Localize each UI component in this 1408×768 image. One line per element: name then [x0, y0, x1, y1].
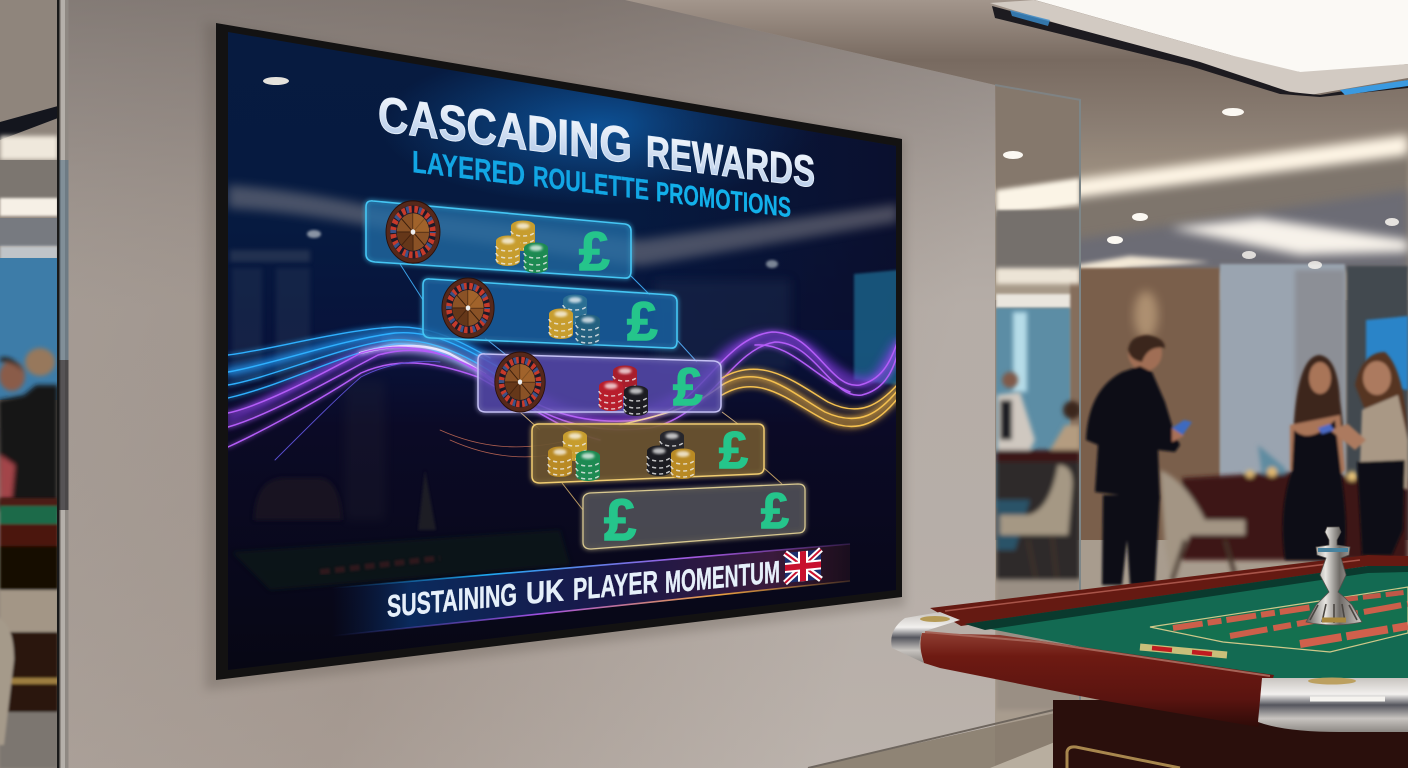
banner text — [387, 554, 780, 624]
chips — [549, 294, 600, 345]
blue glow behind title — [402, 72, 783, 198]
counter behind people — [1160, 445, 1408, 580]
reflected table — [0, 498, 58, 768]
cove light strip — [997, 135, 1408, 208]
left mirror reflection — [0, 0, 68, 768]
front rail — [920, 633, 1274, 727]
glass panel with reflection — [995, 80, 1081, 726]
green felt — [965, 566, 1408, 682]
subtitle: PROMOTIONS — [656, 176, 791, 223]
banner text: MOMENTUM — [665, 554, 780, 600]
chips left — [548, 430, 600, 481]
bottom banner — [332, 544, 850, 636]
title: REWARDS — [646, 127, 815, 197]
chips right — [647, 430, 695, 479]
roulette wheel — [386, 201, 440, 263]
pound icon right: £ — [761, 483, 789, 539]
chips — [496, 220, 548, 273]
TV screen display — [228, 30, 898, 670]
floor — [995, 540, 1408, 768]
flowing light waves — [228, 327, 898, 460]
tier 3 panel — [478, 352, 721, 417]
person: man in dark suit — [1086, 335, 1192, 585]
floor below wall — [808, 726, 995, 768]
betting layout — [1140, 587, 1408, 655]
pound icon: £ — [719, 422, 748, 480]
banner text: SUSTAINING — [387, 577, 517, 624]
chips — [599, 366, 648, 416]
UK flag — [785, 549, 821, 583]
distant TV — [1366, 316, 1408, 390]
chair — [1160, 470, 1245, 575]
roulette wheel — [442, 278, 494, 338]
tier 5 panel — [583, 483, 805, 553]
pound icon: £ — [627, 290, 658, 352]
dark wall — [1347, 266, 1408, 546]
second ceiling light — [1170, 218, 1408, 255]
mirror frame — [57, 0, 60, 768]
TV screen frame — [216, 23, 902, 680]
light blue wall — [1220, 264, 1345, 524]
reflected couple — [0, 348, 58, 510]
lower ceiling band — [995, 150, 1408, 270]
subtitle: ROULETTE — [533, 161, 649, 207]
wood wall — [1070, 268, 1220, 558]
roulette wheel — [495, 352, 545, 412]
subtitle — [412, 144, 791, 223]
title — [378, 86, 815, 197]
table spindle — [1306, 527, 1362, 625]
chrome corner left — [891, 612, 960, 663]
ceiling light panel — [1035, 0, 1408, 72]
banner text: UK — [526, 572, 564, 611]
chrome ceiling edge — [990, 0, 1408, 97]
ceiling — [600, 0, 1408, 300]
reflected table and chair — [254, 478, 342, 520]
recessed ceiling spotlights — [1003, 108, 1399, 269]
tier 4 panel — [532, 422, 764, 483]
title: CASCADING — [378, 86, 632, 174]
tier 1 panel — [366, 201, 631, 282]
main wall — [68, 0, 995, 768]
connector lines between tiers — [400, 264, 782, 510]
wall shadow around TV — [205, 22, 905, 690]
people: two women — [1283, 352, 1408, 560]
reflected seated figures — [996, 372, 1081, 710]
side bet marker — [1140, 647, 1227, 655]
room reflection on screen — [228, 77, 898, 590]
roulette table base — [891, 527, 1408, 768]
pound icon: £ — [673, 358, 702, 417]
chrome corner right — [1258, 678, 1408, 732]
pound icon: £ — [579, 220, 610, 282]
third light — [1060, 256, 1210, 280]
banner text: PLAYER — [573, 564, 658, 607]
pound icon left: £ — [604, 488, 636, 553]
subtitle: LAYERED — [412, 144, 525, 193]
back rail — [930, 555, 1408, 626]
tier 2 panel — [423, 278, 677, 352]
